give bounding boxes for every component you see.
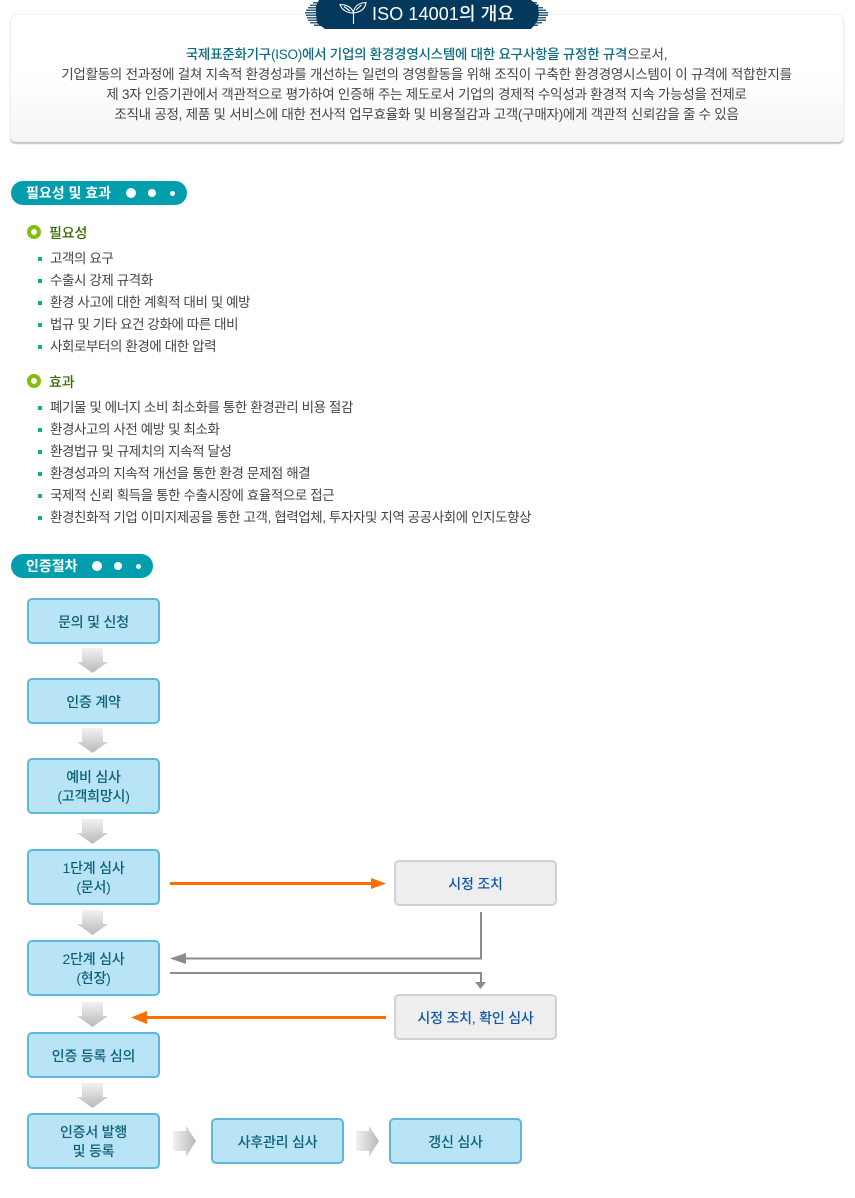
step: certificate issue: [27, 1113, 160, 1169]
necessity list: 법규 및 기타 요건 강화에 따른 대비: [50, 317, 238, 332]
intro text block: [61, 47, 792, 122]
step: follow-up audit: 사후관리 심사: [238, 1134, 317, 1150]
arrow: orange back to registration review: [131, 1011, 386, 1024]
step: preliminary audit: [27, 758, 160, 814]
necessity list: 사회로부터의 환경에 대한 압력: [50, 339, 216, 354]
step: certification contract: 인증 계약: [66, 694, 121, 710]
intro text block: 조직내 공정, 제품 및 서비스에 대한 전사적 업무효율화 및 비용절감과 고객(구매자)에게 객관적 신뢰감을 줄 수 있음: [114, 107, 739, 122]
title banner: ISO 14001 overview: ISO 14001의 개요: [372, 4, 514, 24]
effects list: 환경사고의 사전 예방 및 최소화: [50, 422, 220, 437]
arrow: down 5: [77, 1002, 108, 1027]
step: corrective action confirmation audit: [394, 994, 557, 1040]
section heading: certification procedure: [11, 554, 153, 578]
arrow: down 3: [77, 819, 108, 844]
subheading: necessity: 필요성: [49, 225, 87, 241]
arrow: down 1: [77, 648, 108, 673]
arrow: down 2: [77, 728, 108, 753]
step: renewal audit: 갱신 심사: [428, 1134, 483, 1150]
step: preliminary audit: (고객희망시): [57, 788, 130, 804]
section heading: certification procedure: 인증절차: [26, 558, 78, 574]
arrow: down 4: [77, 910, 108, 935]
arrow: down 6: [77, 1083, 108, 1108]
effects list: 환경성과의 지속적 개선을 통한 환경 문제점 해결: [50, 466, 310, 481]
effects list: 환경친화적 기업 이미지제공을 통한 고객, 협력업체, 투자자및 지역 공공사회에 인지도향상: [50, 510, 531, 525]
effects list: [38, 400, 532, 525]
necessity list: 수출시 강제 규격화: [50, 273, 153, 288]
necessity list: 고객의 요구: [50, 251, 113, 266]
section heading: necessity and effects: 필요성 및 효과: [26, 185, 111, 201]
step: stage 1 audit: 1단계 심사: [62, 860, 124, 876]
title banner: ISO 14001 overview: [305, 0, 548, 29]
subheading: effects: [27, 374, 75, 390]
step: stage 2 audit: 2단계 심사: [62, 951, 124, 967]
intro text block: 제 3자 인증기관에서 객관적으로 평가하여 인증해 주는 제도로서 기업의 경제적 수익성과 환경적 지속 가능성을 전제로: [106, 87, 747, 102]
step: certification contract: [27, 678, 160, 724]
subheading: necessity: [27, 225, 87, 241]
step: registration review: 인증 등록 심의: [52, 1048, 135, 1064]
step: certificate issue: 및 등록: [73, 1143, 114, 1159]
section heading: necessity and effects: [11, 181, 187, 205]
subheading: effects: 효과: [49, 374, 75, 390]
step: corrective action: 시정 조치: [448, 876, 503, 892]
step: corrective action: [394, 860, 557, 906]
step: stage 2 audit: [27, 940, 160, 996]
necessity list: [38, 251, 250, 354]
arrow: grey back to stage 2 audit: [170, 912, 481, 964]
step: registration review: [27, 1032, 160, 1078]
step: inquiry and application: 문의 및 신청: [58, 614, 129, 630]
arrow: orange to corrective action: [170, 878, 386, 889]
step: follow-up audit: [211, 1118, 344, 1164]
effects list: 국제적 신뢰 획득을 통한 수출시장에 효율적으로 접근: [50, 488, 334, 503]
intro text block: 국제표준화기구(ISO)에서 기업의 환경경영시스템에 대한 요구사항을 규정한 규격으로서,: [186, 47, 667, 62]
effects list: 환경법규 및 규제치의 지속적 달성: [50, 444, 232, 459]
necessity list: 환경 사고에 대한 계획적 대비 및 예방: [50, 295, 250, 310]
step: inquiry and application: [27, 598, 160, 644]
arrow: grey down to confirmation audit: [170, 973, 486, 989]
step: renewal audit: [389, 1118, 522, 1164]
panel: overview: [10, 14, 844, 142]
step: preliminary audit: 예비 심사: [66, 769, 121, 785]
step: stage 1 audit: (문서): [76, 879, 111, 895]
step: corrective action confirmation audit: 시정 조치, 확인 심사: [417, 1010, 534, 1026]
effects list: 폐기물 및 에너지 소비 최소화를 통한 환경관리 비용 절감: [50, 400, 353, 415]
step: stage 1 audit: [27, 849, 160, 905]
arrow: right to renewal audit: [356, 1126, 379, 1157]
intro text block: 기업활동의 전과정에 걸쳐 지속적 환경성과를 개선하는 일련의 경영활동을 위해 조직이 구축한 환경경영시스템이 이 규격에 적합한지를: [61, 67, 792, 82]
arrow: right to follow-up audit: [173, 1126, 196, 1157]
step: certificate issue: 인증서 발행: [60, 1124, 127, 1140]
step: stage 2 audit: (현장): [76, 970, 111, 986]
